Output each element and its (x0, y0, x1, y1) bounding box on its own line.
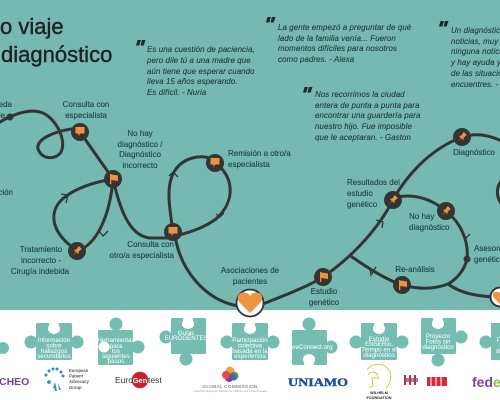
puzzle: participacion (220, 323, 280, 360)
node labels: Resultados del (347, 178, 400, 187)
quote: Alexa: La gente empezó a preguntar de qué (278, 23, 412, 32)
logo: EPAG: Patient (69, 374, 84, 378)
logo: red marks (404, 375, 447, 386)
puzzle: proyecto fotos (421, 318, 468, 366)
node labels: genético (309, 298, 340, 307)
logo: Global Commission (193, 366, 267, 393)
puzzle: proyecto fotos: Fotos sin (425, 338, 451, 346)
puzzle: herramientas: pasos (108, 358, 124, 365)
puzzle: participacion: basada en la (232, 348, 268, 355)
node labels (0, 100, 500, 307)
node labels: No hay (127, 129, 153, 138)
puzzle: guias (160, 318, 212, 366)
quote: Alexa (266, 17, 412, 64)
quote: Nuria: Es difícil. - Nuria (147, 88, 207, 97)
teal background panel (0, 0, 500, 310)
puzzle: proyecto fotos: diagnóstico (422, 344, 454, 351)
puzzle: hallazgos: Información (38, 337, 71, 344)
node labels: No hay (409, 212, 434, 221)
puzzle: participacion: experiencia (234, 353, 266, 360)
puzzle: ENSERio: Tiempo en el (361, 346, 397, 354)
node labels: incorrecto - (21, 256, 61, 265)
node labels: especialista (228, 160, 270, 169)
logo: Global Commission: to End the Diagnostic Odyssey for Children with a Rare Disease (193, 389, 267, 393)
puzzle: ENSERio: ENSERio. (365, 341, 393, 348)
quote: Alexa: lado de la familia venía... Fueron (278, 34, 396, 43)
node labels: Asociaciones de (221, 266, 280, 275)
logo: EPAG (44, 368, 89, 391)
node: Remision (206, 154, 224, 172)
node: Tratamiento incorrecto (68, 242, 86, 260)
puzzle: guias: EUROGENTEST (164, 335, 212, 342)
journey path (0, 111, 500, 306)
quote: Alexa: como padres. - Alexa (278, 55, 355, 64)
puzzle: herramientas: siguientes (102, 353, 130, 360)
logo: Wilhelm Foundation (366, 364, 392, 400)
quote: diagnosis (439, 21, 500, 89)
direction arrows (61, 172, 470, 275)
puzzle: hallazgos: sobre (46, 342, 62, 350)
puzzle: hallazgos: secundarios (37, 353, 71, 360)
puzzle: hallazgos: hallazgos (41, 348, 67, 355)
node: Resultados (384, 191, 402, 209)
node labels: estudio (347, 189, 373, 198)
node labels: Cirugía indebida (11, 267, 70, 276)
puzzle: rareconnect (285, 318, 338, 365)
node: dot top left (6, 114, 14, 120)
white footer (0, 310, 500, 400)
quote: Nuria: aún tiene que esperar cuando (147, 67, 255, 76)
quote: Gaston: nuestro hijo. Fue imposible (315, 122, 413, 131)
logo: EPAG: European (69, 368, 89, 373)
node labels: diagnóstico / (118, 140, 163, 149)
node labels: incorrecto (122, 161, 158, 170)
node: No hay diagnostico (104, 170, 122, 188)
node: Estudio genetico (314, 268, 332, 286)
title: diagnóstico (1, 42, 112, 67)
node labels: diagnóstico (409, 223, 450, 232)
node labels: Estudio (311, 287, 338, 296)
node: Re-analisis (393, 276, 411, 294)
logo: Global Commission: GLOBAL COMMISSION (202, 384, 258, 390)
puzzle: herramientas (97, 318, 144, 365)
quote: Gaston: entera de punta a punta para (315, 101, 420, 110)
puzzle: proyecto fotos: Proyecto (426, 333, 451, 340)
quote: Nuria: Es una cuestión de paciencia, (147, 45, 255, 54)
puzzle: right partial (480, 323, 500, 360)
logo: EuroGentest: Euro (115, 375, 133, 385)
puzzle: participacion: Participación (232, 337, 268, 344)
quote: Nuria: lleva 15 años esperando. (147, 77, 238, 86)
puzzle: herramientas: Herramientas (97, 337, 135, 344)
icon: heart node right (490, 288, 500, 306)
logo: EuroGentest: test (148, 375, 162, 385)
puzzle: rareconnect: RareConnect.org (285, 344, 333, 351)
logo: EuroGentest (115, 372, 162, 388)
puzzle: herramientas: los (112, 348, 120, 355)
node labels: Diagnóstico (119, 150, 161, 159)
quote: Gaston: encontrar una guardería para (315, 111, 421, 120)
icon: heart node (236, 290, 264, 316)
puzzle: herramientas: para (110, 343, 123, 350)
node labels: Re-análisis (395, 265, 435, 274)
node: Consulta con otro especialista (164, 223, 182, 241)
quote: Nuria: pero dile tú a una madre que (146, 56, 251, 65)
logo: UNIAMO: UNIAMO (288, 377, 348, 389)
node labels: Remisión a otro/a (228, 149, 291, 158)
node labels: Consulta con (127, 240, 174, 249)
logo: EPAG: Group (69, 385, 82, 390)
quote: Gaston (303, 87, 421, 142)
logo: EuroGentest: Gen (133, 376, 148, 385)
puzzle: left partial (0, 342, 9, 354)
node labels: Diagnóstico (453, 148, 495, 157)
quote: Gaston: Nos recorrimos la ciudad (315, 90, 405, 99)
logo: FEDER: fede (472, 374, 500, 390)
quote: Gaston: que le aceptaran. - Gaston (315, 133, 412, 142)
title: o viaje (0, 14, 64, 39)
title (0, 14, 112, 67)
puzzle: hallazgos (24, 323, 84, 360)
node: Consulta con especialista (71, 123, 89, 141)
node: Diagnostico (453, 128, 471, 146)
node labels: Consulta con (63, 100, 109, 109)
logo: Wilhelm Foundation: WILHELM (370, 391, 388, 395)
logo: EPAG: Advocacy (69, 379, 89, 384)
puzzle: guias: Guías (178, 330, 194, 337)
node labels: genético (347, 200, 378, 209)
quote: Alexa: momentos difíciles para nosotros (278, 44, 397, 53)
logo: Wilhelm Foundation: FOUNDATION (366, 396, 392, 400)
puzzle: ENSERio (350, 323, 408, 360)
node labels: otro/a especialista (110, 251, 175, 260)
node: dot counselling (464, 256, 470, 262)
quote: Nuria (136, 40, 255, 97)
node labels: pacientes (233, 277, 267, 286)
puzzle: ENSERio: diagnóstico (363, 352, 395, 359)
node: No hay diagnostico 2 (437, 202, 455, 220)
puzzle: participacion: colectiva (238, 342, 263, 350)
puzzle: ENSERio: Estudio (369, 336, 390, 343)
node labels: especialista (65, 111, 107, 120)
node labels: Tratamiento (20, 245, 63, 254)
